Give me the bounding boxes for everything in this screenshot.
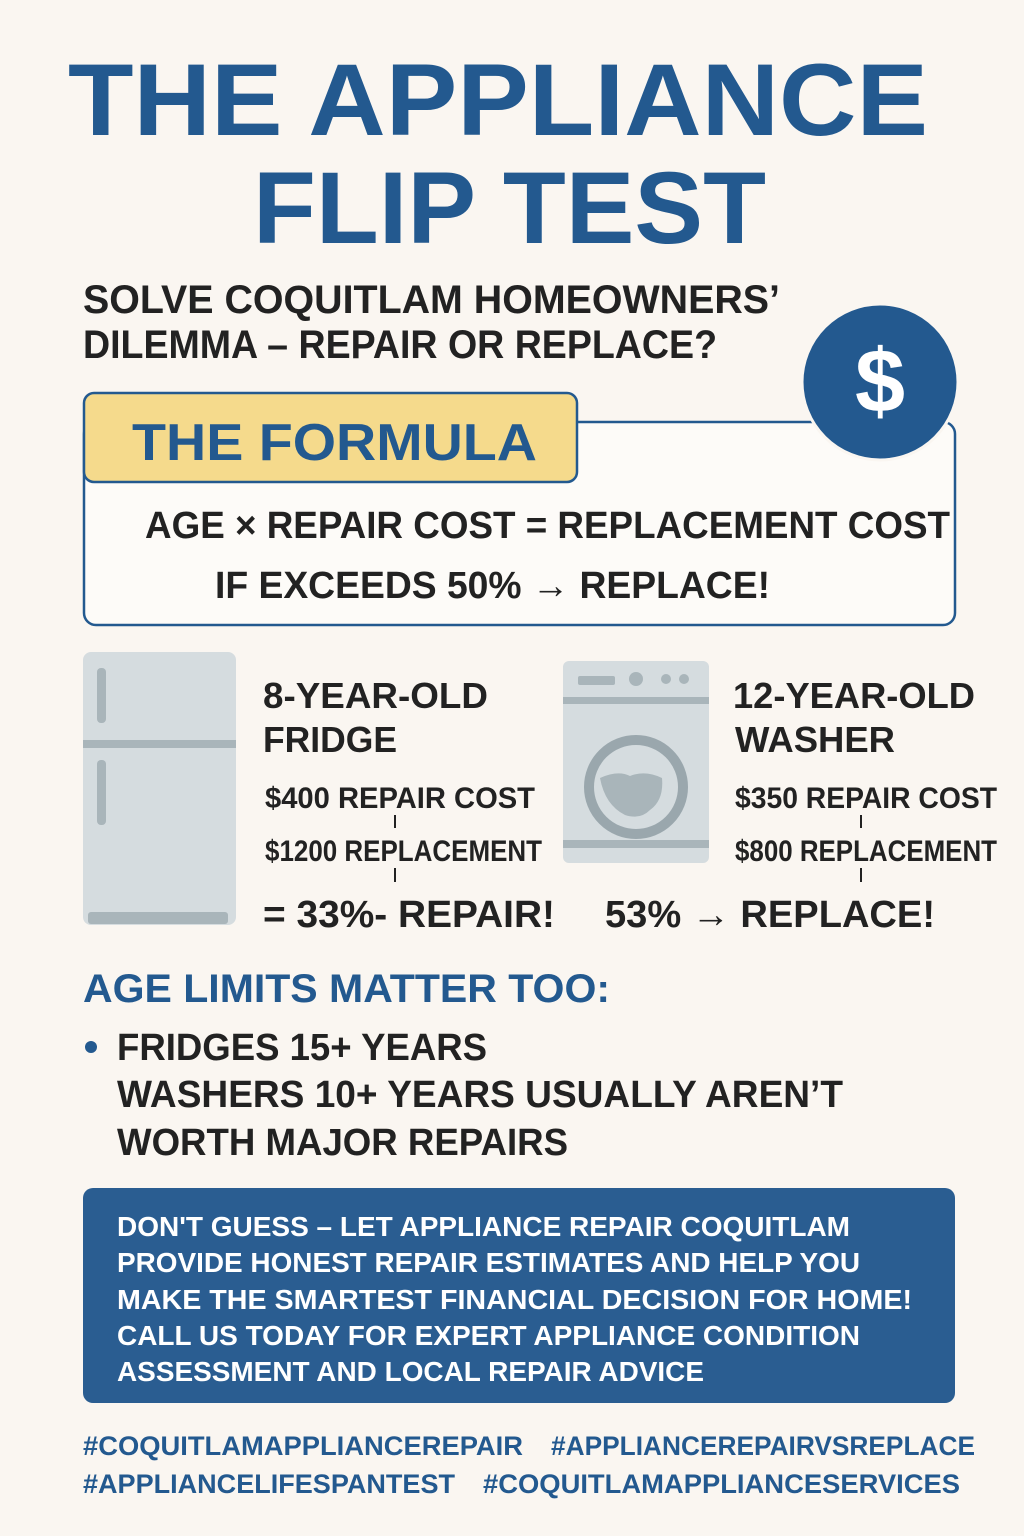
text: fridge example: 8-YEAR-OLD — [263, 675, 488, 716]
text: fridge example: = 33%- REPAIR! — [263, 894, 555, 936]
text: washer example: WASHER — [735, 719, 895, 760]
hashtags: #APPLIANCELIFESPANTEST — [83, 1469, 456, 1499]
icon: dollar coin — [802, 304, 958, 460]
formula tab: THE FORMULA — [132, 414, 537, 472]
title: FLIP TEST — [253, 151, 766, 265]
callout: call to action: DON'T GUESS – LET APPLIANCE REPAIR COQUITLAM — [117, 1211, 850, 1242]
formula tab — [84, 393, 577, 482]
text: fridge example: FRIDGE — [263, 719, 397, 760]
text: washer example: 53% → REPLACE! — [605, 894, 935, 936]
callout: call to action — [83, 1188, 955, 1403]
hashtags: #COQUITLAMAPPLIANCESERVICES — [483, 1469, 960, 1499]
text: age limits list: WORTH MAJOR REPAIRS — [117, 1122, 568, 1164]
callout: call to action: PROVIDE HONEST REPAIR ESTIMATES AND HELP YOU — [117, 1247, 860, 1278]
panel: formula — [84, 393, 955, 625]
text: fridge example — [263, 675, 555, 936]
text: fridge example: $400 REPAIR COST — [265, 782, 535, 815]
icon: washer — [563, 661, 709, 863]
formula text — [145, 505, 950, 607]
text: age limits list: FRIDGES 15+ YEARS — [117, 1027, 487, 1069]
text: washer example — [605, 675, 997, 936]
title — [68, 43, 928, 265]
formula text: AGE × REPAIR COST = REPLACEMENT COST — [145, 505, 950, 547]
text: fridge example: $1200 REPLACEMENT — [265, 835, 542, 868]
formula text: IF EXCEEDS 50% → REPLACE! — [215, 565, 770, 607]
hashtags: #COQUITLAMAPPLIANCEREPAIR — [83, 1431, 523, 1461]
text: age limits list — [85, 1027, 843, 1164]
icon: dollar coin: $ — [855, 332, 905, 432]
hashtags: #APPLIANCEREPAIRVSREPLACE — [551, 1431, 975, 1461]
subtitle: SOLVE COQUITLAM HOMEOWNERS’ — [83, 278, 780, 322]
callout: call to action: ASSESSMENT AND LOCAL REPAIR ADVICE — [117, 1356, 704, 1387]
hashtags — [83, 1431, 975, 1499]
subtitle — [83, 278, 780, 367]
callout: call to action: CALL US TODAY FOR EXPERT APPLIANCE CONDITION — [117, 1320, 860, 1351]
icon: fridge — [83, 652, 236, 925]
subtitle: DILEMMA – REPAIR OR REPLACE? — [83, 323, 717, 367]
heading: age limits: AGE LIMITS MATTER TOO: — [83, 967, 610, 1011]
text: age limits list: WASHERS 10+ YEARS USUALLY AREN’T — [117, 1074, 843, 1116]
callout: call to action: MAKE THE SMARTEST FINANCIAL DECISION FOR HOME! — [117, 1284, 912, 1315]
text: washer example: 12-YEAR-OLD — [733, 675, 975, 716]
title: THE APPLIANCE — [68, 43, 928, 157]
text: washer example: $350 REPAIR COST — [735, 782, 997, 815]
